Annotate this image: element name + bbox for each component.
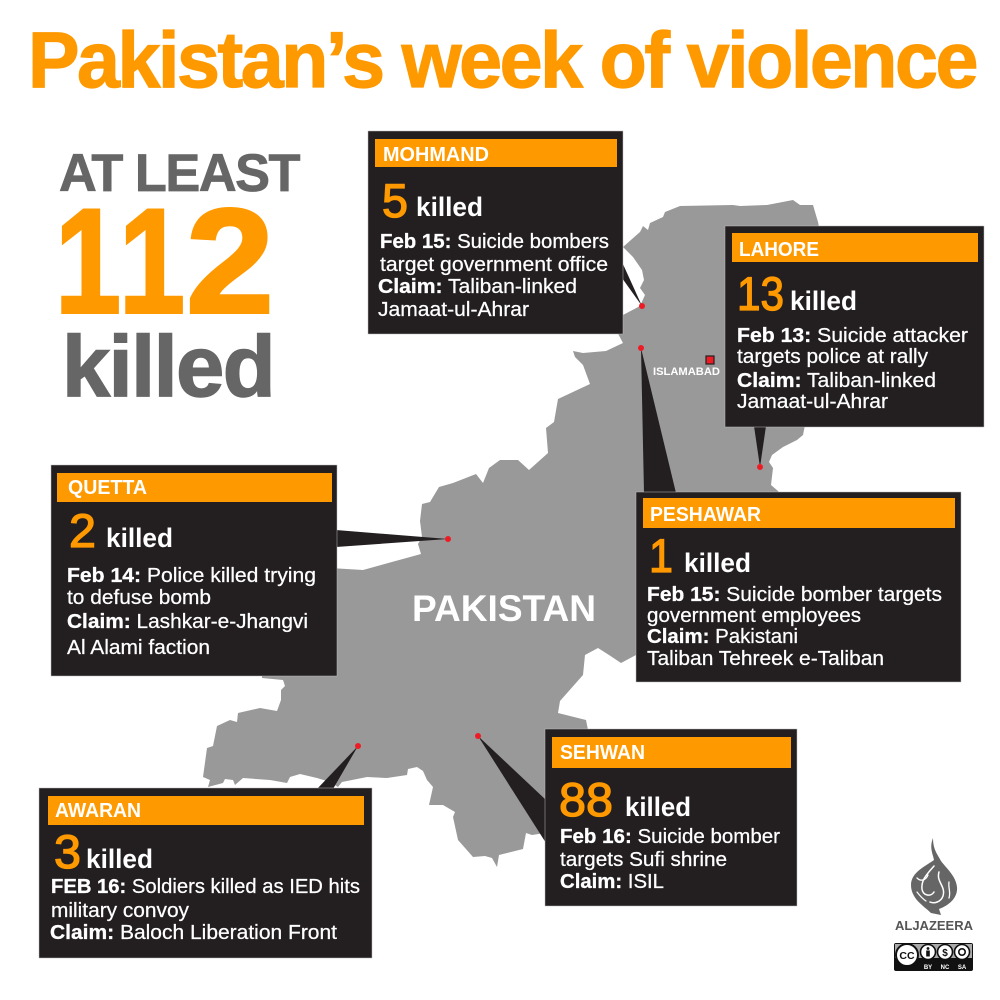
panel: Awaran [39,788,372,958]
Awaran death toll: 3 [54,825,81,878]
Awaran death toll [54,825,153,878]
Mohmand details [378,231,609,321]
Quetta death toll: 2 [69,504,96,557]
Awaran details: FEB 16: Soldiers killed as IED hits [51,876,360,898]
Quetta details: to defuse bomb [67,587,211,609]
Sehwan details: Feb 16: Suicide bomber [560,826,780,848]
Peshawar details: Claim: Pakistani [647,626,798,648]
Sehwan heading: SEHWAN [560,742,645,764]
Mohmand death toll: killed [416,192,483,222]
Sehwan death toll: 88 [559,773,613,826]
Peshawar heading: PESHAWAR [650,504,762,526]
Mohmand details: Claim: Taliban-linked [378,276,577,298]
Peshawar death toll: killed [684,548,751,578]
icon: Creative Commons licence badge: CC [899,950,915,962]
icon: Al Jazeera logo [895,838,974,933]
pointer: Lahore [754,426,766,470]
icon: Creative Commons licence badge [894,943,973,971]
Awaran details [50,876,360,944]
panel: Peshawar [636,492,961,682]
Lahore death toll: 13 [737,267,784,320]
Lahore death toll: killed [790,286,857,316]
pointer: Awaran [317,743,361,789]
Peshawar details: government employees [647,605,861,627]
killed label: killed [62,319,274,415]
Sehwan details: targets Sufi shrine [560,849,727,871]
Lahore details [737,325,968,413]
Sehwan details: Claim: ISIL [560,871,664,893]
map of Pakistan [203,200,830,867]
Awaran heading: AWARAN [55,800,141,822]
Peshawar details [647,584,942,670]
icon: Creative Commons licence badge: SA [958,965,967,971]
Al Jazeera wordmark: ALJAZEERA [895,918,974,933]
pointer: Mohmand [622,262,645,309]
Lahore details: Jamaat-ul-Ahrar [737,391,888,413]
Lahore details: Feb 13: Suicide attacker [737,325,968,347]
panel: Lahore [725,226,984,427]
Lahore heading: LAHORE [739,239,819,261]
112 number: 1 [55,178,121,344]
map label: PAKISTAN: PAKISTAN [412,588,596,629]
Awaran death toll: killed [86,844,153,874]
panel: Quetta [51,465,337,676]
title: Pakistan’s week of violence [28,15,977,104]
panel: Mohmand [368,131,623,334]
Peshawar death toll: 1 [649,529,673,582]
capital square [706,356,714,364]
Quetta death toll [69,504,173,557]
Mohmand death toll: 5 [382,174,408,227]
Peshawar details: Feb 15: Suicide bomber targets [647,584,942,606]
Quetta heading: QUETTA [68,477,147,499]
Quetta details: Al Alami faction [67,637,210,659]
Awaran details: military convoy [51,900,189,922]
Mohmand details: Jamaat-ul-Ahrar [378,299,529,321]
Mohmand heading: MOHMAND [383,144,489,166]
112 number: 2 [186,178,274,344]
Sehwan details [560,826,780,893]
Sehwan death toll: killed [625,792,691,822]
Lahore details: targets police at rally [737,346,928,368]
112 number [55,178,274,344]
Islamabad label: ISLAMABAD [653,366,720,378]
Islamabad marker [653,356,720,378]
panel: Sehwan [545,729,797,906]
Peshawar details: Taliban Tehreek e-Taliban [647,648,884,670]
Quetta details: Feb 14: Police killed trying [67,565,316,587]
Quetta death toll: killed [106,523,173,553]
Quetta details: Claim: Lashkar-e-Jhangvi [67,611,308,633]
pointer: Sehwan [475,733,546,843]
Mohmand details: target government office [380,254,608,276]
Lahore details: Claim: Taliban-linked [737,370,936,392]
Quetta details [67,565,316,659]
Sehwan death toll [559,773,691,826]
112 number: 1 [119,178,185,344]
pointer: Quetta [336,530,451,547]
icon: Creative Commons licence badge: NC [941,965,950,971]
Peshawar death toll [649,529,751,582]
icon: Creative Commons licence badge: BY [924,965,932,971]
pointer: Peshawar [638,345,676,493]
headline stat: at least 112 killed [55,144,300,415]
Mohmand details: Feb 15: Suicide bombers [380,231,609,253]
icon: Creative Commons licence badge: $ [942,948,948,959]
at least label: AT LEAST [59,144,300,203]
Lahore death toll [737,267,857,320]
Awaran details: Claim: Baloch Liberation Front [50,922,337,944]
Mohmand death toll [382,174,483,227]
